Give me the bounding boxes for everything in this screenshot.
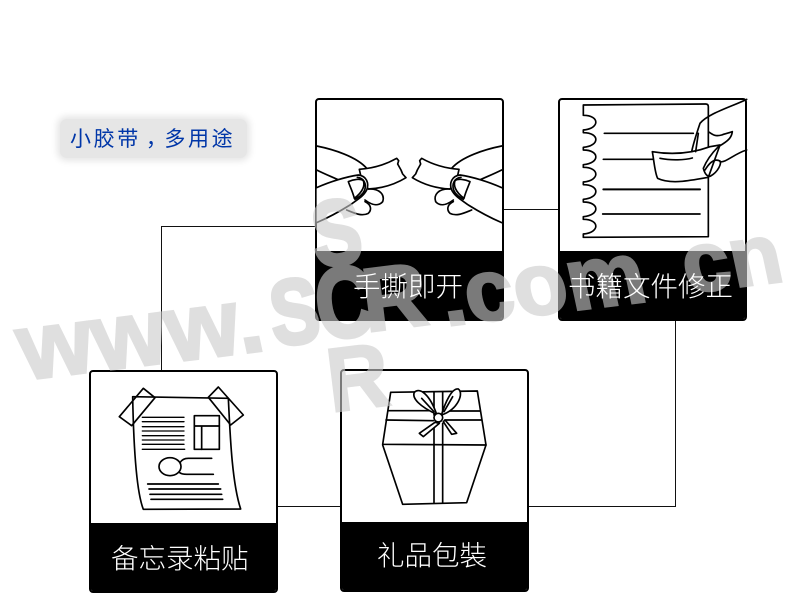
black band xyxy=(317,251,502,319)
black band xyxy=(560,251,745,319)
black band xyxy=(342,522,527,590)
label: book correction: 书籍文件修正 xyxy=(568,264,733,304)
watermark: C xyxy=(309,244,380,362)
watermark: S xyxy=(306,179,367,287)
card: hand tearing xyxy=(315,98,504,321)
label: gift wrapping: 礼品包裝 xyxy=(377,533,487,573)
watermark: .com xyxy=(429,223,654,345)
label: tear by hand: 手撕即开 xyxy=(353,264,463,304)
card: book correction xyxy=(558,98,747,321)
watermark: S xyxy=(264,258,325,366)
title badge xyxy=(60,119,247,158)
card: memo pasting xyxy=(89,370,278,593)
watermark: cn xyxy=(672,206,790,312)
watermark: R xyxy=(356,244,433,352)
black band xyxy=(91,523,276,591)
label: memo pasting: 备忘录粘贴 xyxy=(111,536,248,576)
card: gift wrapping xyxy=(340,369,529,592)
watermark: R xyxy=(321,323,395,431)
watermark: www. xyxy=(6,267,272,401)
title text: 小胶带，多用途 xyxy=(70,123,235,153)
